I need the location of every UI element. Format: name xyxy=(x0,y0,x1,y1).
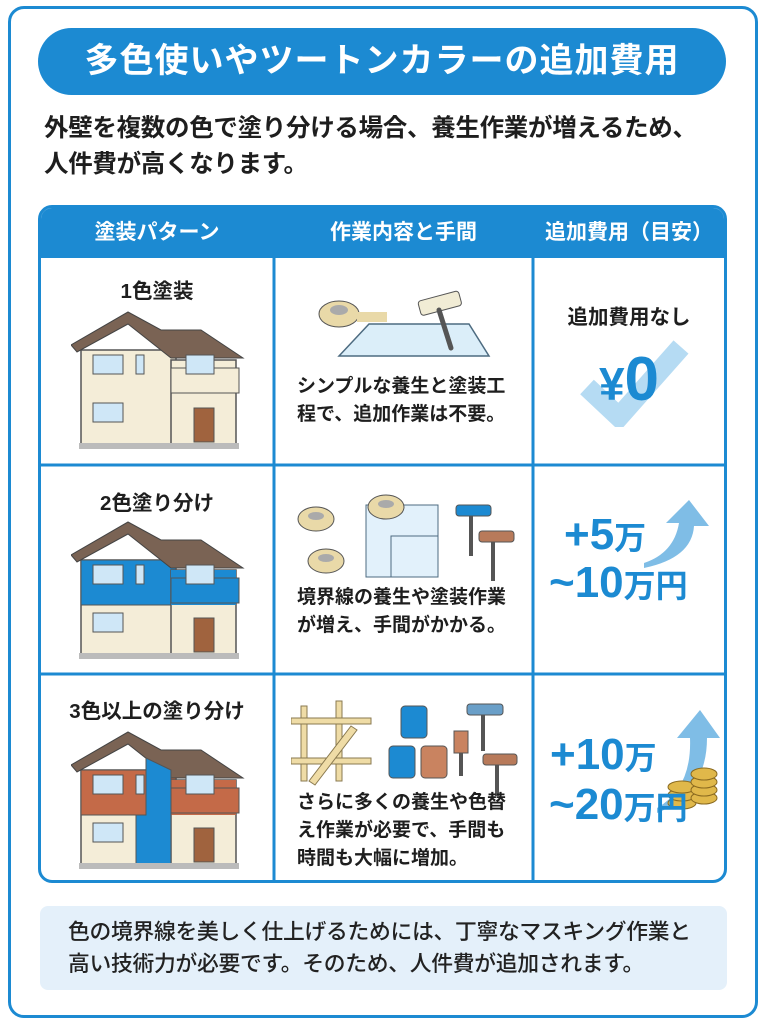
row1 price: ¥0 xyxy=(599,345,659,414)
row3 price xyxy=(549,710,720,829)
header row xyxy=(41,208,724,258)
row1 label: 1色塗装 xyxy=(121,280,193,303)
row3 desc: さらに多くの養生や色替え作業が必要で、手間も時間も大幅に増加。 xyxy=(297,792,506,869)
row2 desc: 境界線の養生や塗装作業が増え、手間がかかる。 xyxy=(297,587,506,636)
intro text: 外壁を複数の色で塗り分ける場合、養生作業が増えるため、 xyxy=(44,115,697,142)
row1 price xyxy=(580,340,688,427)
bottom note xyxy=(40,906,727,990)
row3 icon: scaffold, paint cans, brushes xyxy=(291,700,518,796)
row2 price: +5万 xyxy=(564,510,646,559)
arrow up with coins xyxy=(657,710,720,813)
grid lines xyxy=(41,258,724,880)
row1 desc: シンプルな養生と塗装工程で、追加作業は不要。 xyxy=(297,376,505,425)
title: 多色使いやツートンカラーの追加費用 xyxy=(84,42,680,80)
header: pattern: 塗装パターン xyxy=(95,221,219,244)
header: work: 作業内容と手間 xyxy=(330,221,477,244)
row2 label: 2色塗り分け xyxy=(100,492,214,515)
row1 icon: tape and roller xyxy=(318,290,490,357)
title xyxy=(38,28,726,95)
checkmark xyxy=(580,340,688,427)
row2 price xyxy=(549,500,709,607)
bottom note: 色の境界線を美しく仕上げるためには、丁寧なマスキング作業と xyxy=(68,919,691,944)
intro text: 人件費が高くなります。 xyxy=(44,151,308,178)
table xyxy=(38,205,727,883)
header: cost: 追加費用（目安） xyxy=(545,221,713,244)
intro text xyxy=(44,114,697,178)
row3 label: 3色以上の塗り分け xyxy=(69,700,245,723)
row2 icon: tapes, sheet, rollers xyxy=(298,494,514,581)
row1 house xyxy=(71,311,244,449)
row3 price: ~20万円 xyxy=(549,780,688,829)
row1 cost label: 追加費用なし xyxy=(568,306,690,329)
row3 price: +10万 xyxy=(550,730,657,779)
arrow up xyxy=(644,500,709,568)
row2 house xyxy=(71,521,244,659)
row2 price: ~10万円 xyxy=(549,558,688,607)
bottom note: 高い技術力が必要です。そのため、人件費が追加されます。 xyxy=(68,951,644,976)
row3 house xyxy=(71,731,244,869)
